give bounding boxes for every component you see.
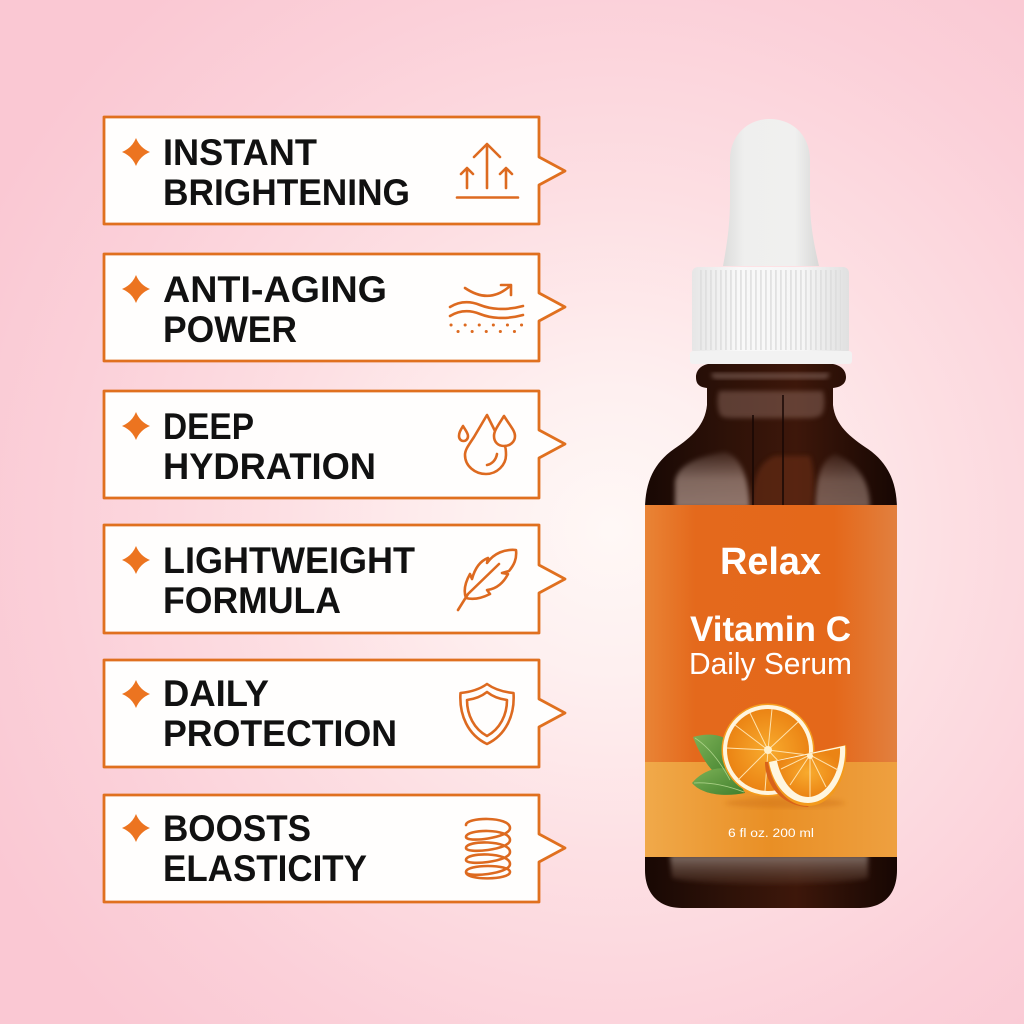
heading: daily protection: DAILY [163, 673, 269, 714]
heading: boosts elasticity: ELASTICITY [163, 848, 367, 889]
orange half [722, 704, 814, 796]
icon: sparkle [122, 412, 150, 440]
heading: instant brightening: INSTANT [163, 132, 317, 173]
heading: lightweight formula: LIGHTWEIGHT [163, 540, 415, 581]
heading: lightweight formula: FORMULA [163, 580, 341, 621]
heading: deep hydration: HYDRATION [163, 446, 376, 487]
amber glass bottle [645, 364, 897, 908]
icon: sparkle [122, 138, 150, 166]
icon: sparkle [122, 546, 150, 574]
glass highlights [670, 373, 870, 884]
product name: Vitamin C [690, 610, 851, 649]
leaves [692, 735, 745, 795]
icon: rising arrows [457, 144, 518, 198]
heading: instant brightening: BRIGHTENING [163, 172, 410, 213]
icon: water drops [459, 415, 515, 474]
heading: boosts elasticity: BOOSTS [163, 808, 311, 849]
panel: anti-aging power [104, 254, 565, 361]
heading: deep hydration: DEEP [163, 406, 254, 447]
illustration: orange with leaves [692, 704, 846, 808]
heading: anti-aging power: POWER [163, 309, 297, 350]
icon: spring coil [466, 819, 510, 878]
icon: smoothing skin waves [450, 285, 525, 332]
icon: sparkle [122, 680, 150, 708]
icon: feather [458, 550, 516, 610]
bottle label [645, 505, 897, 857]
volume: 6 fl oz. 200 ml [728, 828, 814, 840]
icon: shield [460, 684, 514, 744]
heading: anti-aging power: ANTI-AGING [163, 269, 387, 310]
icon: sparkle [122, 814, 150, 842]
icon: sparkle [122, 275, 150, 303]
brand name: Relax [720, 541, 821, 583]
product descriptor: Daily Serum [689, 646, 852, 681]
panel: deep hydration [104, 391, 565, 498]
panel: instant brightening [104, 117, 565, 224]
panel: boosts elasticity [104, 795, 565, 902]
panel: lightweight formula [104, 525, 565, 633]
panel: daily protection [104, 660, 565, 767]
serum bottle [645, 119, 897, 908]
orange slice [765, 745, 846, 807]
dropper bulb [723, 119, 819, 266]
heading: daily protection: PROTECTION [163, 713, 397, 754]
dropper cap [690, 267, 852, 364]
